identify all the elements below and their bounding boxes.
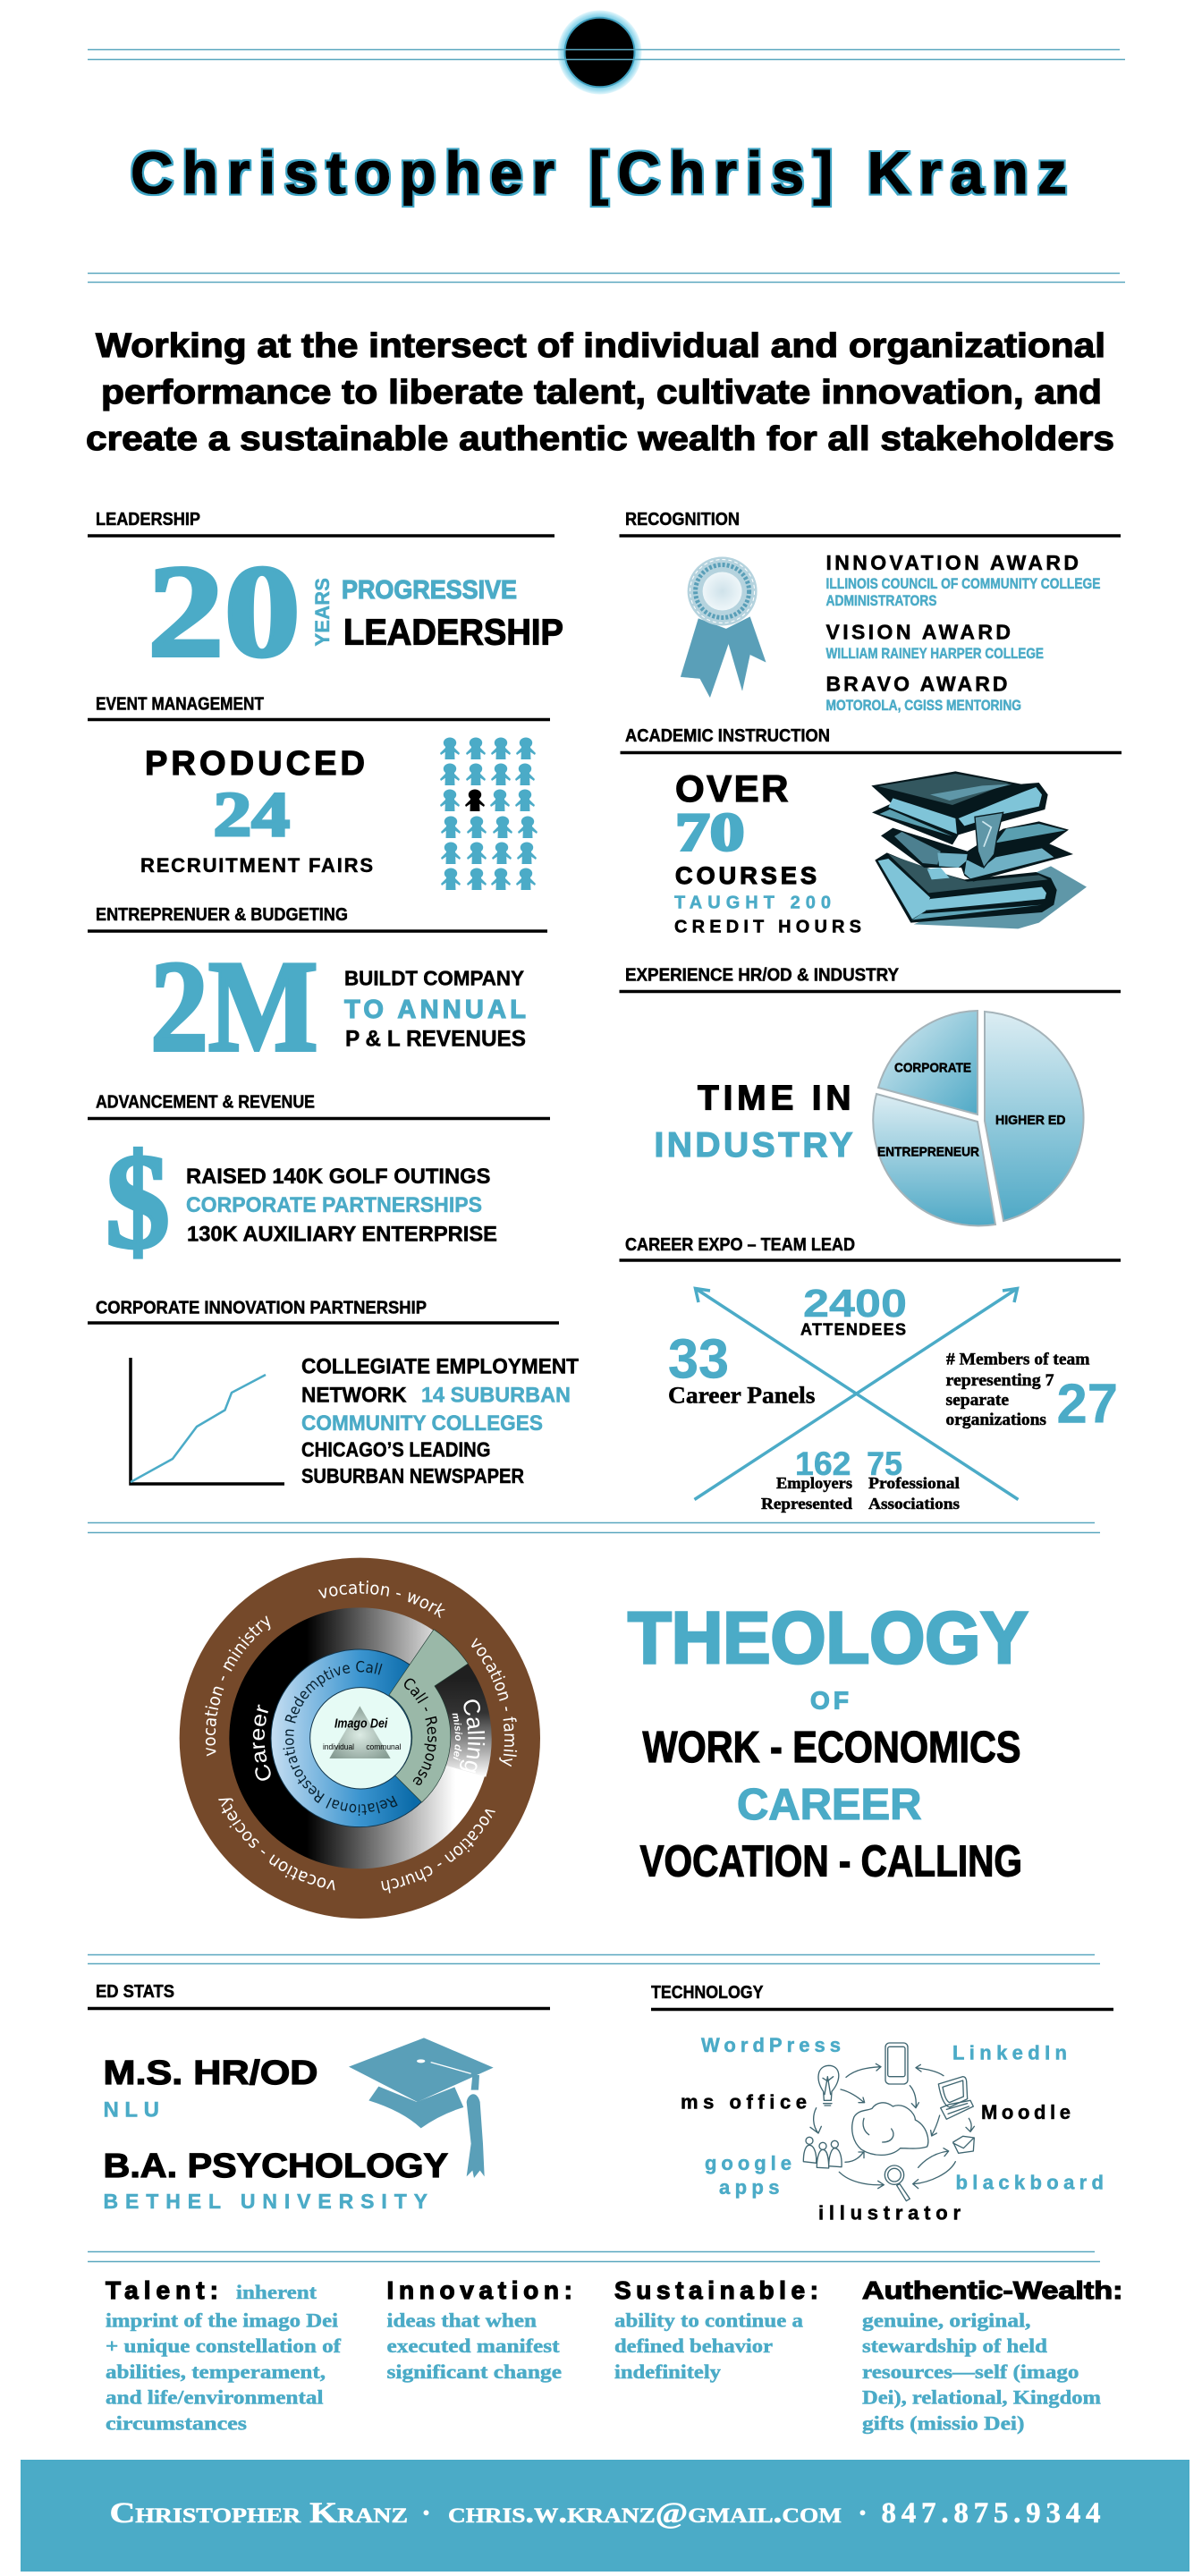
text: 130k auxiliary enterprise: 130K AUXILIARY ENTERPRISE	[187, 1222, 497, 1247]
text: progressive: PROGRESSIVE	[342, 576, 517, 605]
award: bravo: MOTOROLA, CGISS MENTORING	[826, 697, 1021, 714]
definition: talent	[106, 2276, 342, 2435]
arrows: crossed	[694, 1288, 1018, 1499]
stat: 2400 attendees: ATTENDEES	[800, 1320, 906, 1338]
stat: 33 career panels: 33	[668, 1329, 729, 1390]
award: bravo: BRAVO AWARD	[826, 673, 1007, 696]
text: industry: INDUSTRY	[655, 1126, 853, 1165]
heading: recognition: RECOGNITION	[625, 510, 740, 530]
label: wordpress: WordPress	[701, 2034, 841, 2056]
stat: 27 team members: 27	[1057, 1374, 1118, 1435]
panel: corporate innovation partnership	[88, 1299, 579, 1487]
heading: ed stats: ED STATS	[96, 1982, 174, 2002]
label: google apps: apps	[719, 2176, 780, 2199]
stat: 75 associations: Associations	[868, 1495, 960, 1513]
icon: technology cloud cluster	[803, 2043, 974, 2201]
definition: talent: inherent	[236, 2281, 317, 2303]
label: ms office: ms office	[681, 2091, 807, 2113]
stat: 33 career panels	[668, 1329, 816, 1408]
panel: event management	[88, 694, 550, 890]
stat: 75 associations	[867, 1445, 960, 1513]
definition: authentic wealth: stewardship of held	[862, 2334, 1047, 2357]
text: leadership: LEADERSHIP	[343, 612, 563, 653]
stat: 24: 24	[213, 780, 290, 850]
award: innovation: ADMINISTRATORS	[826, 592, 937, 609]
diagram: vocation wheel: vocation - ministry	[205, 1615, 270, 1757]
line chart	[131, 1358, 284, 1484]
panel: education stats	[88, 1982, 550, 2213]
diagram: vocation wheel: vocation - society	[218, 1798, 334, 1891]
text: career: CAREER	[737, 1781, 921, 1829]
stat: 162 employers	[761, 1445, 852, 1513]
text: time in: TIME IN	[698, 1079, 851, 1118]
stat: 75 associations: 75	[867, 1445, 902, 1482]
panel: technology	[651, 1983, 1113, 2224]
text: partnership description: COMMUNITY COLLEGES	[301, 1411, 543, 1436]
text: credit hours: CREDIT HOURS	[674, 918, 861, 937]
award: vision	[826, 621, 1044, 662]
icon: graduation cap	[349, 2038, 494, 2178]
heading: leadership: LEADERSHIP	[96, 510, 200, 530]
pie chart: time in industry: ENTREPRENEUR	[877, 1145, 979, 1159]
definition: sustainable: defined behavior	[614, 2334, 773, 2357]
definition: talent: circumstances	[106, 2411, 248, 2435]
heading: experience: EXPERIENCE HR/OD & INDUSTRY	[625, 966, 900, 986]
stat: 27 team members: separate	[946, 1391, 1009, 1410]
footer contact bar	[21, 2460, 1189, 2572]
stat: 33 career panels: Career Panels	[668, 1383, 816, 1408]
footer contact bar: Christopher Kranz	[109, 2497, 408, 2529]
definition: authentic wealth: resources—self (imago	[862, 2360, 1079, 2383]
text: work economics: WORK - ECONOMICS	[642, 1724, 1021, 1772]
header top divider lines	[88, 50, 1125, 59]
icon: award ribbon	[681, 556, 766, 698]
award: bravo	[826, 673, 1021, 714]
heading: technology: TECHNOLOGY	[651, 1983, 764, 2003]
text: partnership description: COLLEGIATE EMPLOYMENT	[301, 1354, 579, 1379]
stat: 2M: 2M	[150, 934, 318, 1079]
icon: dollar sign: $	[106, 1126, 170, 1276]
footer contact bar: ·	[858, 2497, 868, 2529]
stat: 70: 70	[675, 803, 744, 862]
definition: talent: and life/environmental	[106, 2386, 324, 2408]
stat: 162 employers: Represented	[761, 1495, 852, 1513]
definition: sustainable: ability to continue a	[614, 2309, 803, 2331]
text: partnership description: NETWORK	[301, 1383, 407, 1408]
pie chart: time in industry: HIGHER ED	[995, 1113, 1066, 1128]
label: google apps	[705, 2152, 791, 2199]
award: vision: WILLIAM RAINEY HARPER COLLEGE	[826, 645, 1044, 662]
text: bethel university: BETHEL UNIVERSITY	[104, 2190, 427, 2213]
label: blackboard: blackboard	[955, 2172, 1104, 2193]
text: raised 140k golf outings: RAISED 140K GOLF OUTINGS	[186, 1165, 490, 1189]
award: innovation: ILLINOIS COUNCIL OF COMMUNITY COLLEGE	[826, 575, 1100, 592]
diagram: vocation wheel: Career	[252, 1705, 271, 1781]
definition: authentic wealth	[862, 2276, 1123, 2435]
footer contact bar: chris.w.kranz@gmail.com	[448, 2497, 842, 2529]
definition: talent: Talent:	[106, 2276, 218, 2304]
panel: academic instruction	[621, 726, 1122, 937]
diagram: vocation wheel: vocation - church	[381, 1809, 495, 1894]
heading: career expo: CAREER EXPO – TEAM LEAD	[625, 1235, 855, 1255]
definition: authentic wealth: Dei), relational, Kingdom	[862, 2386, 1101, 2408]
panel: recognition	[619, 510, 1121, 714]
text: courses: COURSES	[675, 862, 817, 889]
panel: advancement and revenue	[88, 1093, 550, 1276]
text: vocation calling: VOCATION - CALLING	[640, 1837, 1022, 1885]
award: vision: VISION AWARD	[826, 621, 1011, 644]
diagram: vocation wheel: vocation - family	[471, 1638, 517, 1767]
definitions divider lines	[88, 2252, 1100, 2261]
panel: career expo	[619, 1235, 1121, 1513]
text: of: OF	[810, 1687, 849, 1714]
definition: talent: abilities, temperament,	[106, 2360, 326, 2383]
definition: sustainable	[614, 2276, 818, 2383]
diagram: vocation wheel: vocation - work	[318, 1580, 445, 1619]
label: moodle: Moodle	[981, 2101, 1071, 2123]
diagram: vocation wheel: Relational Restoration Redemptive Call	[283, 1660, 398, 1816]
icon: header black disc with glow	[558, 11, 642, 95]
heading: corporate innovation partnership: CORPORATE INNOVATION PARTNERSHIP	[96, 1299, 427, 1318]
definition: authentic wealth: gifts (missio Dei)	[862, 2411, 1025, 2435]
definition: innovation: executed manifest	[386, 2334, 560, 2357]
icon: people grid	[440, 737, 538, 890]
footer contact bar: ·	[421, 2497, 431, 2529]
stat: 75 associations: Professional	[868, 1474, 960, 1492]
definition: talent: + unique constellation of	[106, 2334, 342, 2357]
diagram: vocation wheel: individual	[323, 1742, 354, 1751]
text: ba psychology: B.A. PSYCHOLOGY	[104, 2148, 448, 2185]
definition: sustainable: Sustainable:	[614, 2276, 818, 2304]
diagram: vocation wheel: Call - Response	[404, 1678, 437, 1785]
diagram: vocation wheel: communal	[366, 1742, 401, 1751]
diagram: vocation wheel: misio dei	[453, 1714, 462, 1761]
text: partnership description: CHICAGO’S LEADING	[301, 1438, 490, 1462]
stat: 27 team members: # Members of team	[946, 1351, 1090, 1368]
text: nlu: NLU	[104, 2098, 159, 2122]
stat: 162 employers: Employers	[776, 1474, 852, 1492]
diagram: vocation wheel: Calling	[460, 1699, 485, 1773]
definition: sustainable: indefinitely	[614, 2360, 721, 2383]
pie chart: time in industry: CORPORATE	[894, 1061, 971, 1075]
tagline: performance to liberate talent, cultivate innovation, and	[101, 374, 1102, 411]
diagram: vocation wheel	[179, 1558, 540, 1919]
tagline: Working at the intersect of individual and organizational	[96, 327, 1105, 365]
panel: leadership	[88, 510, 563, 685]
heading: advancement and revenue: ADVANCEMENT & REVENUE	[96, 1093, 315, 1113]
header bottom divider lines	[88, 274, 1125, 283]
text: corporate partnerships: CORPORATE PARTNERSHIPS	[186, 1193, 482, 1217]
award: innovation	[826, 551, 1100, 609]
text: partnership description: 14 SUBURBAN	[421, 1383, 571, 1408]
heading: theology: THEOLOGY	[628, 1597, 1028, 1679]
definition: innovation: significant change	[386, 2360, 562, 2383]
theology divider lines	[88, 1522, 1100, 1533]
tagline: create a sustainable authentic wealth for all stakeholders	[86, 420, 1114, 458]
footer contact bar: 847.875.9344	[882, 2497, 1100, 2529]
text: partnership description	[301, 1354, 579, 1487]
text: over: OVER	[675, 767, 789, 809]
panel: theology heading stack	[628, 1597, 1028, 1885]
stat: 2400 attendees	[800, 1282, 907, 1338]
definition: authentic wealth: genuine, original,	[862, 2309, 1030, 2331]
text: built company: BUILDT COMPANY	[344, 966, 524, 989]
award: innovation: INNOVATION AWARD	[826, 551, 1079, 574]
text: taught 200: TAUGHT 200	[674, 893, 831, 912]
label: linkedin: LinkedIn	[952, 2041, 1067, 2064]
text: ms hr od: M.S. HR/OD	[104, 2055, 318, 2092]
heading: academic instruction: ACADEMIC INSTRUCTION	[625, 726, 830, 746]
label: google apps: google	[705, 2152, 791, 2174]
definition: authentic wealth: Authentic-Wealth:	[862, 2276, 1123, 2304]
text: to annual: TO ANNUAL	[344, 996, 526, 1024]
label: illustrator: illustrator	[818, 2202, 961, 2224]
stat: 2400 attendees: 2400	[803, 1282, 907, 1326]
tagline	[86, 327, 1114, 458]
definition: innovation: Innovation:	[386, 2276, 572, 2304]
text: recruitment fairs: RECRUITMENT FAIRS	[140, 854, 373, 877]
icon: stack of books	[871, 771, 1087, 928]
text: p and l revenues: P & L REVENUES	[345, 1027, 526, 1052]
rotated label: years: YEARS	[311, 578, 334, 646]
education divider lines	[88, 1955, 1100, 1964]
definition: talent: imprint of the imago Dei	[106, 2309, 338, 2331]
stat: 162 employers: 162	[795, 1445, 851, 1482]
stat: 27 team members	[946, 1351, 1118, 1435]
text: produced: PRODUCED	[145, 745, 365, 783]
text: partnership description: SUBURBAN NEWSPAPER	[301, 1464, 524, 1487]
title: Christopher [Chris] Kranz	[131, 140, 1067, 206]
stat: 27 team members: representing 7	[946, 1371, 1054, 1390]
heading: entrepreneur and budgeting: ENTREPRENUER & BUDGETING	[96, 905, 348, 925]
definition: innovation: ideas that when	[386, 2309, 537, 2331]
pie chart: time in industry	[873, 1011, 1084, 1225]
panel: entrepreneur and budgeting	[88, 905, 547, 1079]
panel: experience	[619, 966, 1121, 1225]
stat: 20: 20	[148, 538, 300, 685]
stat: 27 team members: organizations	[946, 1411, 1046, 1429]
definition: innovation	[386, 2276, 572, 2383]
diagram: vocation wheel: Imago Dei	[334, 1717, 388, 1732]
heading: event management: EVENT MANAGEMENT	[96, 694, 264, 714]
